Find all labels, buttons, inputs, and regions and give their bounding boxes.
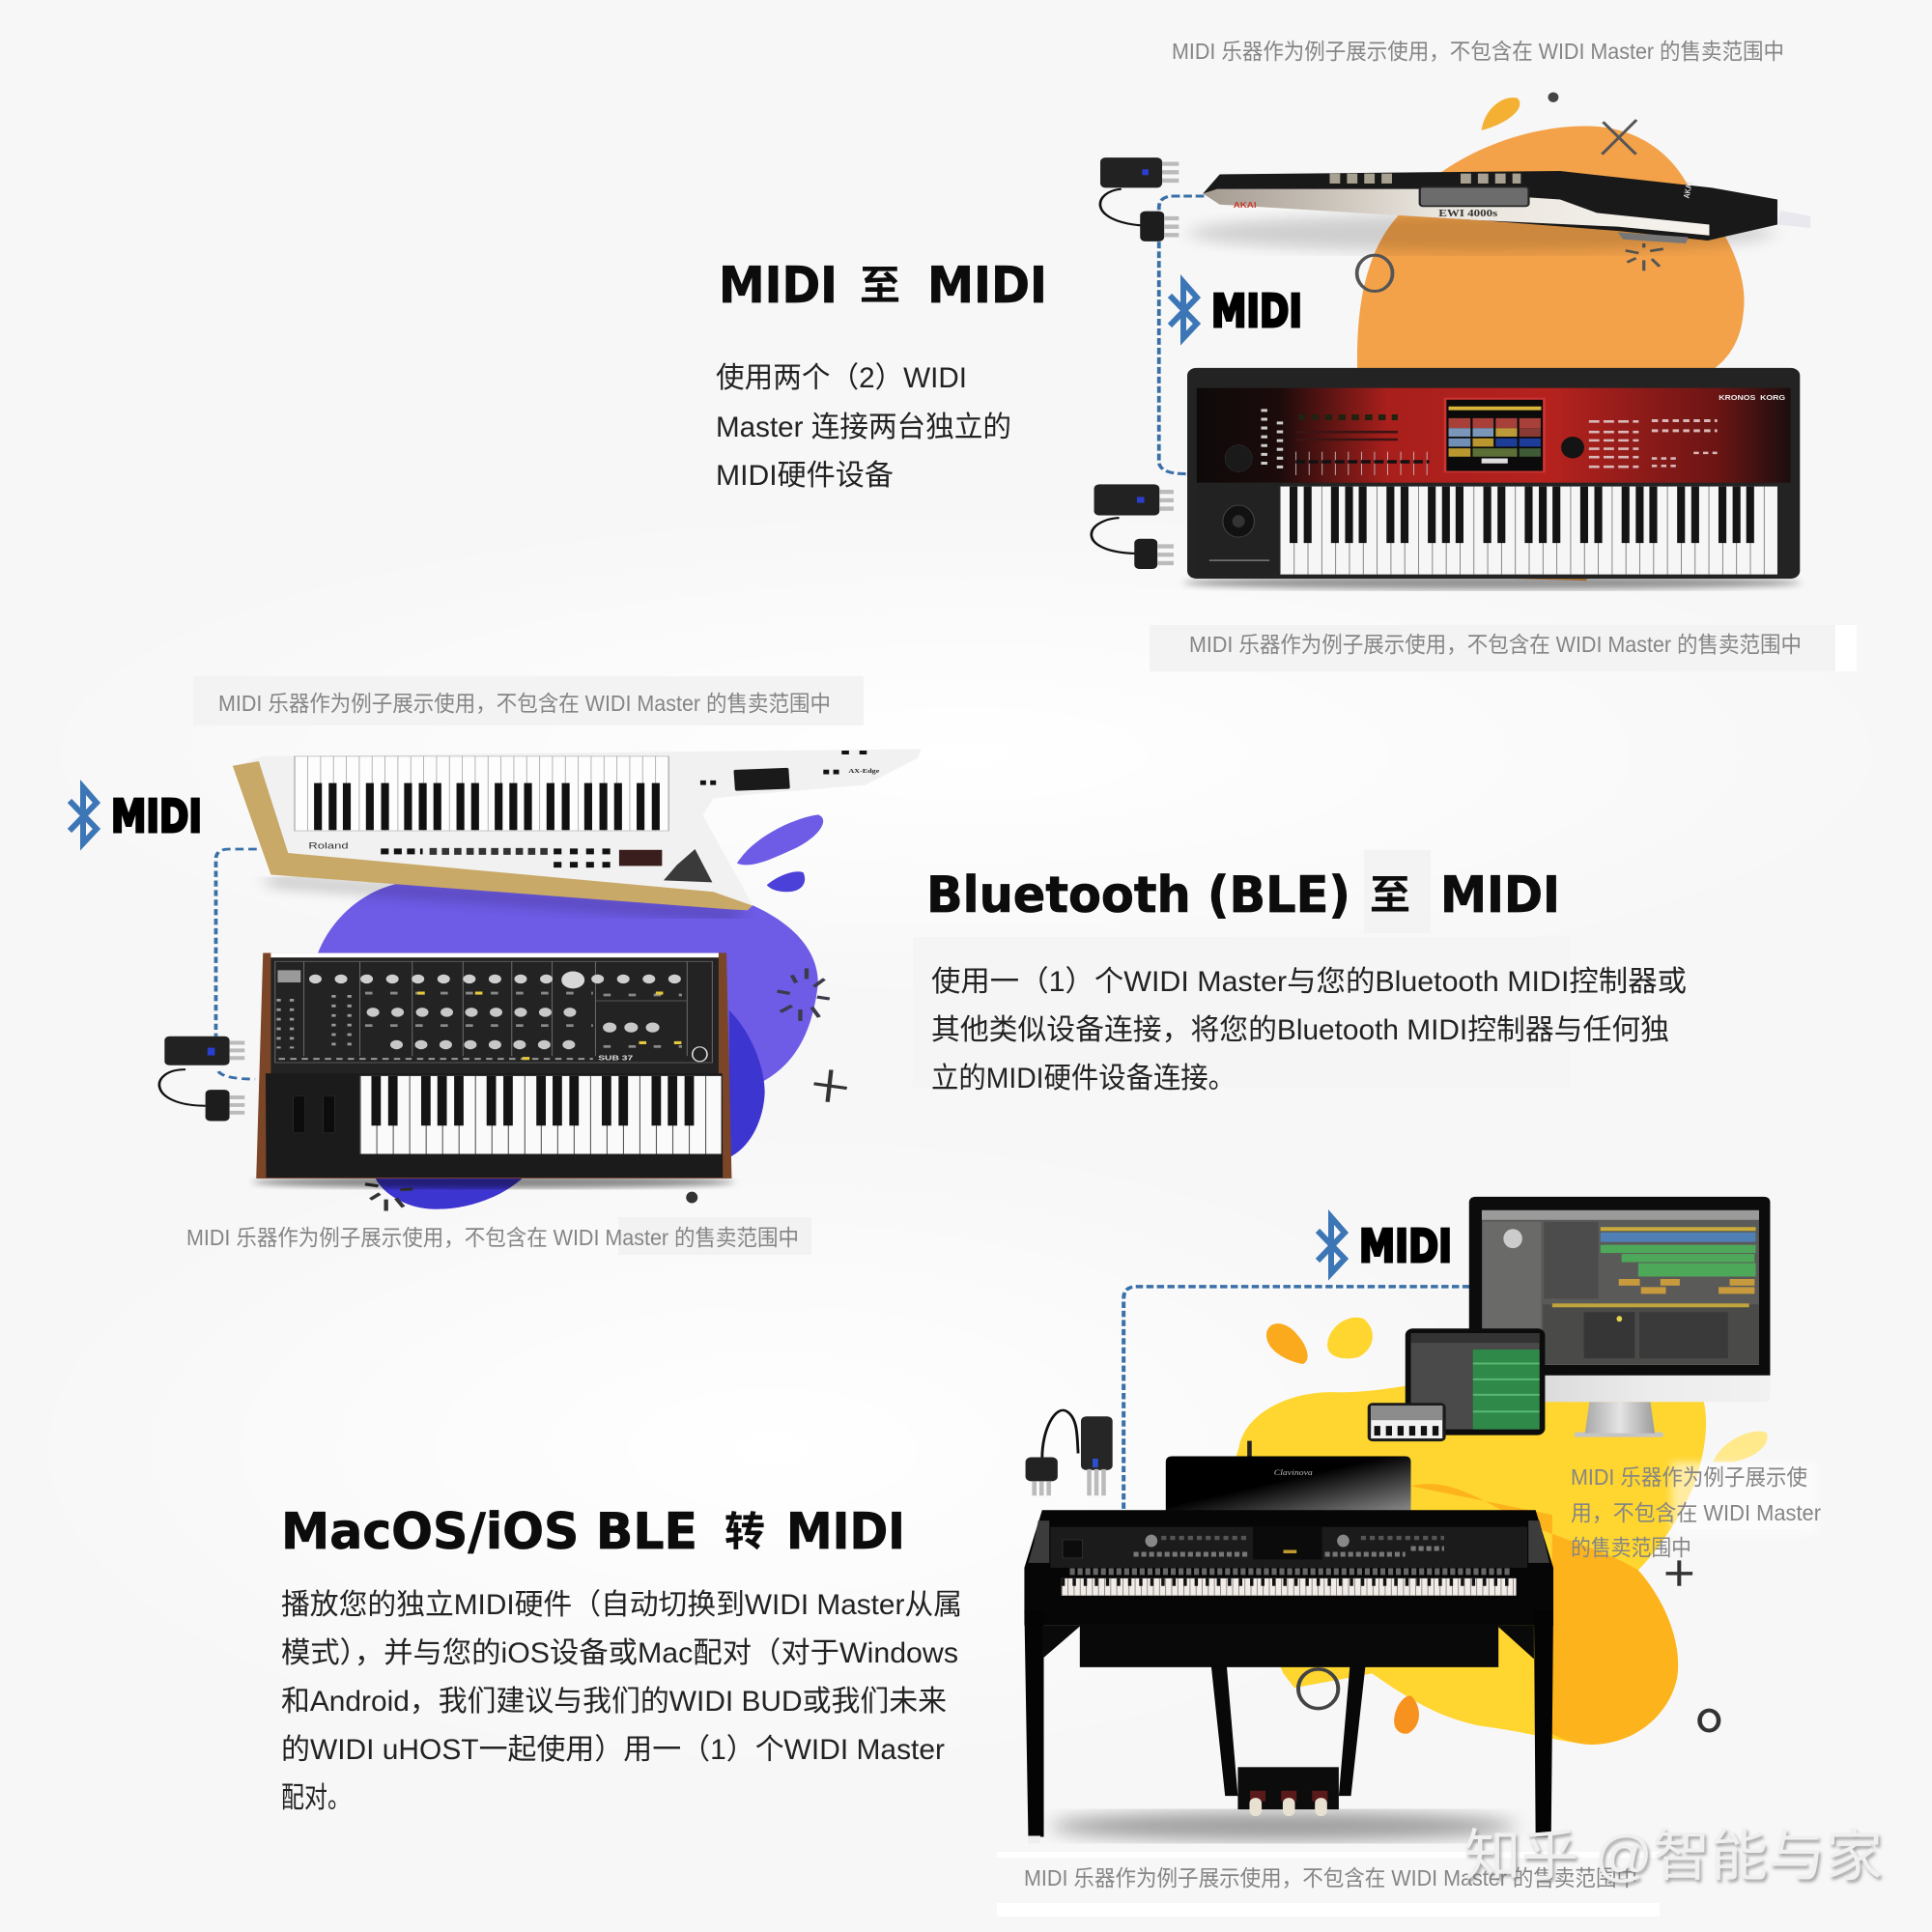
logo: Bluetooth MIDI: MIDI (1359, 1220, 1452, 1272)
caption: above keytar (193, 676, 864, 725)
caption: under workstation: MIDI 乐器作为例子展示使用，不包含在 WIDI Master 的售卖范围中 (1189, 632, 1802, 657)
text block: Bluetooth to MIDI description: 其他类似设备连接，将您的Bluetooth MIDI控制器与任何独 (931, 1014, 1669, 1046)
WIDI Master dongle vertical (1026, 1410, 1113, 1495)
watermark: 知乎 @智能与家 (1463, 1825, 1883, 1888)
text block: MacOS/iOS description: 播放您的独立MIDI硬件（自动切换到WIDI Master从属 (281, 1589, 962, 1621)
logo: Bluetooth MIDI (1170, 282, 1302, 338)
icon: bluetooth (1170, 282, 1197, 338)
yellow drop (1327, 1318, 1373, 1358)
text block: MacOS/iOS description: 和Android，我们建议与我们的WIDI BUD或我们未来 (281, 1686, 947, 1718)
section: MIDI to MIDI (716, 39, 1857, 671)
heading: Bluetooth to MIDI: 至 (1370, 863, 1410, 922)
heading: Bluetooth to MIDI (926, 850, 1560, 933)
icon: bluetooth (70, 787, 97, 843)
heading: MIDI to MIDI (719, 253, 1047, 315)
caption: three-line note: MIDI 乐器作为例子展示使 (1571, 1464, 1807, 1490)
heading: Bluetooth to MIDI: Bluetooth (BLE) (926, 867, 1350, 924)
illustration: piano, iMac and tablet (1024, 1197, 1816, 1843)
decorative yellow blob (1217, 1382, 1706, 1745)
EWI wind controller: AKAI (1234, 201, 1257, 210)
heading: MIDI to MIDI: MIDI (927, 257, 1047, 315)
ring (1357, 255, 1393, 291)
caption: top: MIDI 乐器作为例子展示使用，不包含在 WIDI Master 的售卖范围中 (1172, 39, 1784, 64)
illustration: wind controller and workstation (1092, 92, 1810, 589)
plus mark (814, 1070, 847, 1102)
ring small (1700, 1711, 1719, 1731)
text block: MacOS/iOS description: 的WIDI uHOST一起使用）用一（1）个WIDI Master (281, 1734, 945, 1766)
sunburst mark (778, 968, 830, 1021)
Roland AX-Edge keytar (233, 749, 922, 915)
heading: MacOS/iOS BLE to MIDI: MIDI (786, 1503, 905, 1561)
ring large (1298, 1669, 1338, 1709)
floor shadow (1050, 1812, 1517, 1840)
section: MacOS/iOS BLE to MIDI (281, 1197, 1821, 1917)
Yamaha Clavinova piano (1024, 1441, 1553, 1843)
EWI wind controller: AKAI (1682, 182, 1694, 199)
heading: MIDI to MIDI: 至 (860, 253, 900, 312)
text block: Bluetooth to MIDI description: 使用一（1）个WIDI Master与您的Bluetooth MIDI控制器或 (931, 966, 1687, 998)
heading: MacOS/iOS BLE to MIDI: 转 (724, 1499, 765, 1558)
keybed (360, 1076, 722, 1154)
EWI wind controller (1188, 171, 1810, 252)
knobs (315, 979, 700, 1044)
white smear behind caption (1671, 1462, 1816, 1534)
EWI wind controller: EWI 4000s (1438, 208, 1498, 218)
darker blob overlay (376, 1010, 765, 1209)
caption: under piano: MIDI 乐器作为例子展示使用，不包含在 WIDI Master 的售卖范围中 (1024, 1865, 1637, 1890)
caption: three-line note: 的售卖范围中 (1571, 1535, 1691, 1560)
logo: Bluetooth MIDI: MIDI (1211, 285, 1302, 337)
text block: Bluetooth to MIDI description: 立的MIDI硬件设备连接。 (931, 1063, 1236, 1094)
orange small drop (1394, 1695, 1419, 1734)
text block: MIDI to MIDI description: Master 连接两台独立的 (716, 412, 1011, 443)
text block: MacOS/iOS description (281, 1589, 962, 1814)
purple drop (767, 871, 805, 892)
WIDI Master dongle (159, 1037, 244, 1122)
Moog Sub 37 synthesizer (252, 953, 734, 1188)
pale yellow blob (1713, 1432, 1768, 1462)
caption: above keytar: MIDI 乐器作为例子展示使用，不包含在 WIDI Master 的售卖范围中 (218, 691, 831, 716)
dot (1548, 92, 1558, 102)
caption: under synthesizer (186, 1217, 811, 1255)
keybed (1280, 487, 1777, 575)
orange drop (1266, 1323, 1308, 1364)
Korg Kronos workstation: KRONOS (1719, 394, 1755, 402)
heading: MIDI to MIDI: MIDI (719, 257, 838, 315)
text block: MacOS/iOS description: 配对。 (281, 1782, 351, 1814)
Moog Sub 37 synthesizer: SUB 37 (598, 1054, 633, 1062)
logo: Bluetooth MIDI: MIDI (111, 790, 202, 842)
Yamaha Clavinova piano: Clavinova (1274, 1467, 1313, 1477)
heading: MacOS/iOS BLE to MIDI (281, 1499, 905, 1561)
keybed (1062, 1572, 1517, 1596)
decorative purple blob (258, 880, 818, 1209)
caption: under workstation (1150, 625, 1857, 671)
purple brush stroke (737, 814, 823, 865)
text block: MIDI to MIDI description: MIDI硬件设备 (716, 460, 894, 492)
text block: MIDI to MIDI description (716, 362, 1011, 492)
dashed connection (1159, 196, 1204, 474)
plus mark (1666, 1560, 1692, 1586)
caption: under synthesizer: MIDI 乐器作为例子展示使用，不包含在 WIDI Master 的售卖范围中 (186, 1225, 799, 1250)
screen (1444, 398, 1546, 472)
caption: under piano (997, 1852, 1660, 1917)
small orange drop (1482, 98, 1520, 130)
dashed connection (1123, 1287, 1469, 1510)
WIDI Master dongle upper (1100, 157, 1179, 242)
Roland AX-Edge keytar: Roland (308, 841, 349, 851)
Korg Kronos workstation: KORG (1760, 394, 1785, 402)
heading: Bluetooth to MIDI: MIDI (1440, 867, 1560, 924)
caption: three-line note: 用，不包含在 WIDI Master (1571, 1500, 1821, 1525)
WIDI Master dongle lower (1092, 484, 1174, 569)
icon: bluetooth (1318, 1217, 1345, 1273)
Korg Kronos workstation (1183, 368, 1801, 589)
iMac (1469, 1197, 1770, 1437)
darker orange blob overlay (1410, 1484, 1678, 1745)
text block: MacOS/iOS description: 模式），并与您的iOS设备或Mac配对（对于Windows (281, 1637, 958, 1669)
Roland AX-Edge keytar: AX-Edge (848, 768, 879, 775)
section: Bluetooth to MIDI (70, 676, 1687, 1255)
iPhone (1368, 1403, 1446, 1441)
logo: Bluetooth MIDI (70, 787, 202, 843)
logo: Bluetooth MIDI (1318, 1217, 1452, 1273)
cross mark (1602, 120, 1636, 155)
caption: three-line note (1571, 1464, 1821, 1560)
heading: MacOS/iOS BLE to MIDI: MacOS/iOS BLE (281, 1503, 697, 1561)
text block: Bluetooth to MIDI description (913, 937, 1687, 1094)
dot (686, 1192, 697, 1204)
decorative orange blob (1357, 127, 1745, 581)
dashed connection (215, 849, 257, 1079)
text block: MIDI to MIDI description: 使用两个（2）WIDI (716, 362, 967, 394)
illustration: keytar and synthesizer (159, 749, 922, 1210)
sunburst mark (1626, 243, 1663, 270)
iPad (1406, 1328, 1545, 1435)
sunburst mark bottom (365, 1184, 412, 1210)
